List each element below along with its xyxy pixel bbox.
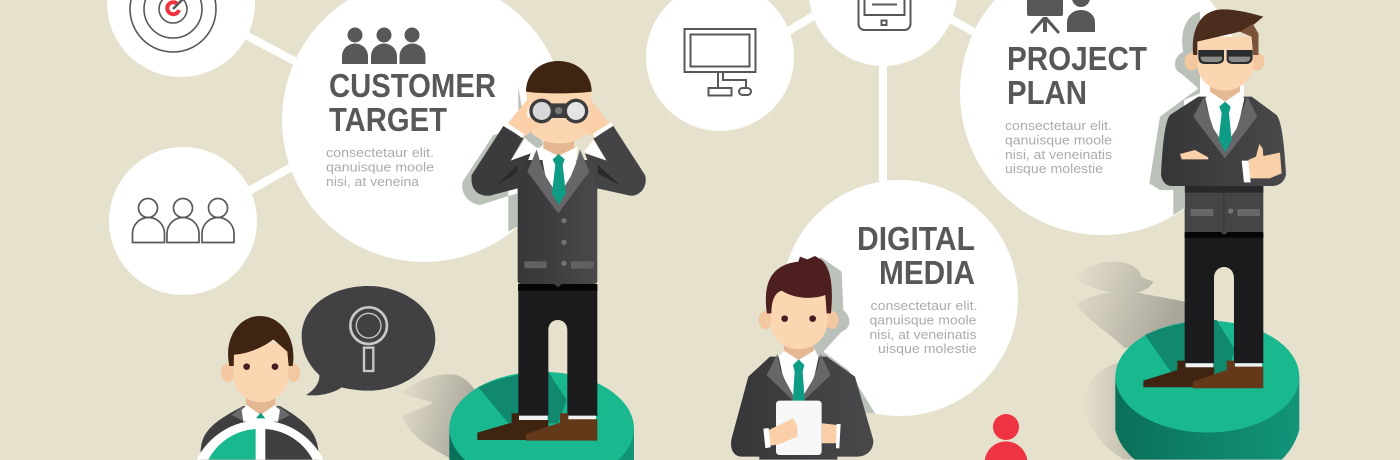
collar <box>1205 92 1244 153</box>
eyes <box>781 315 788 322</box>
eyes <box>243 363 250 370</box>
jacket button <box>1228 208 1233 214</box>
panel: tablet circle <box>809 0 957 66</box>
ears <box>1185 53 1199 71</box>
socks <box>519 416 596 420</box>
shirt sleeve triangles <box>511 140 606 161</box>
trousers <box>1185 233 1263 363</box>
steering wheel <box>197 420 323 460</box>
left shoe <box>1143 361 1214 387</box>
heading: project plan: PLAN <box>1007 74 1087 111</box>
sideburn highlight <box>1240 24 1258 55</box>
neck <box>784 343 814 363</box>
pockets <box>524 261 594 269</box>
lapels <box>1193 97 1257 158</box>
cuff <box>1242 161 1251 182</box>
podium: binocular man <box>449 372 634 460</box>
tie <box>1219 102 1232 153</box>
panel: customer target <box>282 0 566 262</box>
left hand <box>1180 150 1208 159</box>
belt <box>1185 232 1263 238</box>
right hand with thumb <box>1248 144 1282 178</box>
right hand <box>822 423 837 443</box>
figure: man with tablet <box>731 256 875 460</box>
text: customer target body: qanuisque moole <box>326 160 434 174</box>
icon: target <box>130 0 216 52</box>
panel: project plan <box>960 0 1244 235</box>
jacket skirt <box>1185 187 1263 235</box>
hair <box>526 61 592 93</box>
face <box>1197 37 1253 91</box>
lapels <box>767 354 831 402</box>
collar <box>540 147 577 200</box>
panel: people outline circle <box>109 147 257 295</box>
sleeves <box>471 126 531 196</box>
shadow <box>462 87 526 232</box>
ears <box>759 311 772 329</box>
neck and collar <box>246 395 275 418</box>
right shoe <box>1193 361 1263 388</box>
jacket upper <box>1161 97 1286 186</box>
shadow <box>1149 12 1200 215</box>
tie <box>793 359 805 403</box>
icon: red person <box>985 414 1027 460</box>
sleeve creases <box>497 165 620 185</box>
text: digital media body: consectetaur elit. <box>870 298 978 313</box>
jacket <box>201 406 318 460</box>
text: project plan body: uisque molestie <box>1005 161 1103 176</box>
text: digital media body: qanuisque moole <box>870 312 976 328</box>
tie <box>552 154 566 205</box>
text: customer target body: consectetaur elit. <box>326 145 434 160</box>
jacket <box>731 357 873 460</box>
figure: man at steering wheel <box>197 316 323 460</box>
text: digital media body: uisque molestie <box>878 341 976 356</box>
heading: digital media: MEDIA <box>879 254 975 291</box>
panel: digital media <box>782 180 1018 416</box>
hair <box>1193 9 1263 55</box>
cuffs <box>504 122 613 138</box>
panel: target circle <box>107 0 255 77</box>
heading: customer target: CUSTOMER <box>329 67 496 104</box>
right cuff <box>836 424 841 448</box>
icon: presentation board and person <box>1027 0 1095 34</box>
text: project plan body: qanuisque moole <box>1005 132 1112 148</box>
figure: man with sunglasses <box>1143 9 1286 388</box>
jacket dark band <box>1185 186 1263 193</box>
podium segment <box>1145 320 1235 373</box>
panel: monitor circle <box>646 0 794 131</box>
face <box>233 343 288 402</box>
text: project plan body: nisi, at veneinatis <box>1005 147 1113 162</box>
jacket seam <box>1222 192 1225 232</box>
neck gap blobs <box>528 135 538 143</box>
face <box>771 290 827 349</box>
icon: tablet <box>858 0 910 30</box>
neck gap right <box>578 135 587 143</box>
podium: sunglasses man <box>1115 320 1299 460</box>
hair <box>228 316 293 366</box>
shadow <box>813 257 875 413</box>
heading: digital media: DIGITAL <box>857 220 975 257</box>
collar <box>779 351 819 403</box>
lapels <box>527 149 589 213</box>
face <box>526 90 592 143</box>
right shoe <box>526 413 597 441</box>
ears <box>221 363 234 382</box>
speech bubble <box>302 286 435 395</box>
podium segment <box>478 372 567 423</box>
icon: monitor <box>684 29 756 96</box>
text: digital media body: nisi, at veneinatis <box>870 327 977 342</box>
icon: three outlined people <box>132 198 234 242</box>
left hand <box>769 418 797 446</box>
ground shadow: binocular man <box>400 374 477 460</box>
ground shadow: sunglasses man <box>1075 262 1185 459</box>
jacket <box>518 160 597 287</box>
text: customer target body: nisi, at veneina <box>326 174 420 189</box>
tablet <box>776 401 822 455</box>
figure: man with binoculars <box>462 61 646 441</box>
heading: project plan: PROJECT <box>1007 40 1147 77</box>
heading: customer target: TARGET <box>329 101 447 138</box>
hands and forearms <box>507 98 613 137</box>
left shoe <box>477 413 548 440</box>
socks <box>1186 363 1262 368</box>
neck <box>1210 82 1240 103</box>
icon: three people <box>342 28 426 64</box>
icon: magnifier <box>350 307 387 371</box>
neck <box>543 140 574 160</box>
left cuff <box>763 428 771 448</box>
belt <box>518 284 597 291</box>
hair <box>766 256 832 313</box>
text: project plan body: consectetaur elit. <box>1005 118 1112 133</box>
pockets <box>1191 209 1260 216</box>
trousers <box>518 285 597 416</box>
connector lines <box>240 12 985 196</box>
sunglasses <box>1198 50 1253 64</box>
binoculars <box>529 99 588 123</box>
buttons <box>561 218 567 266</box>
